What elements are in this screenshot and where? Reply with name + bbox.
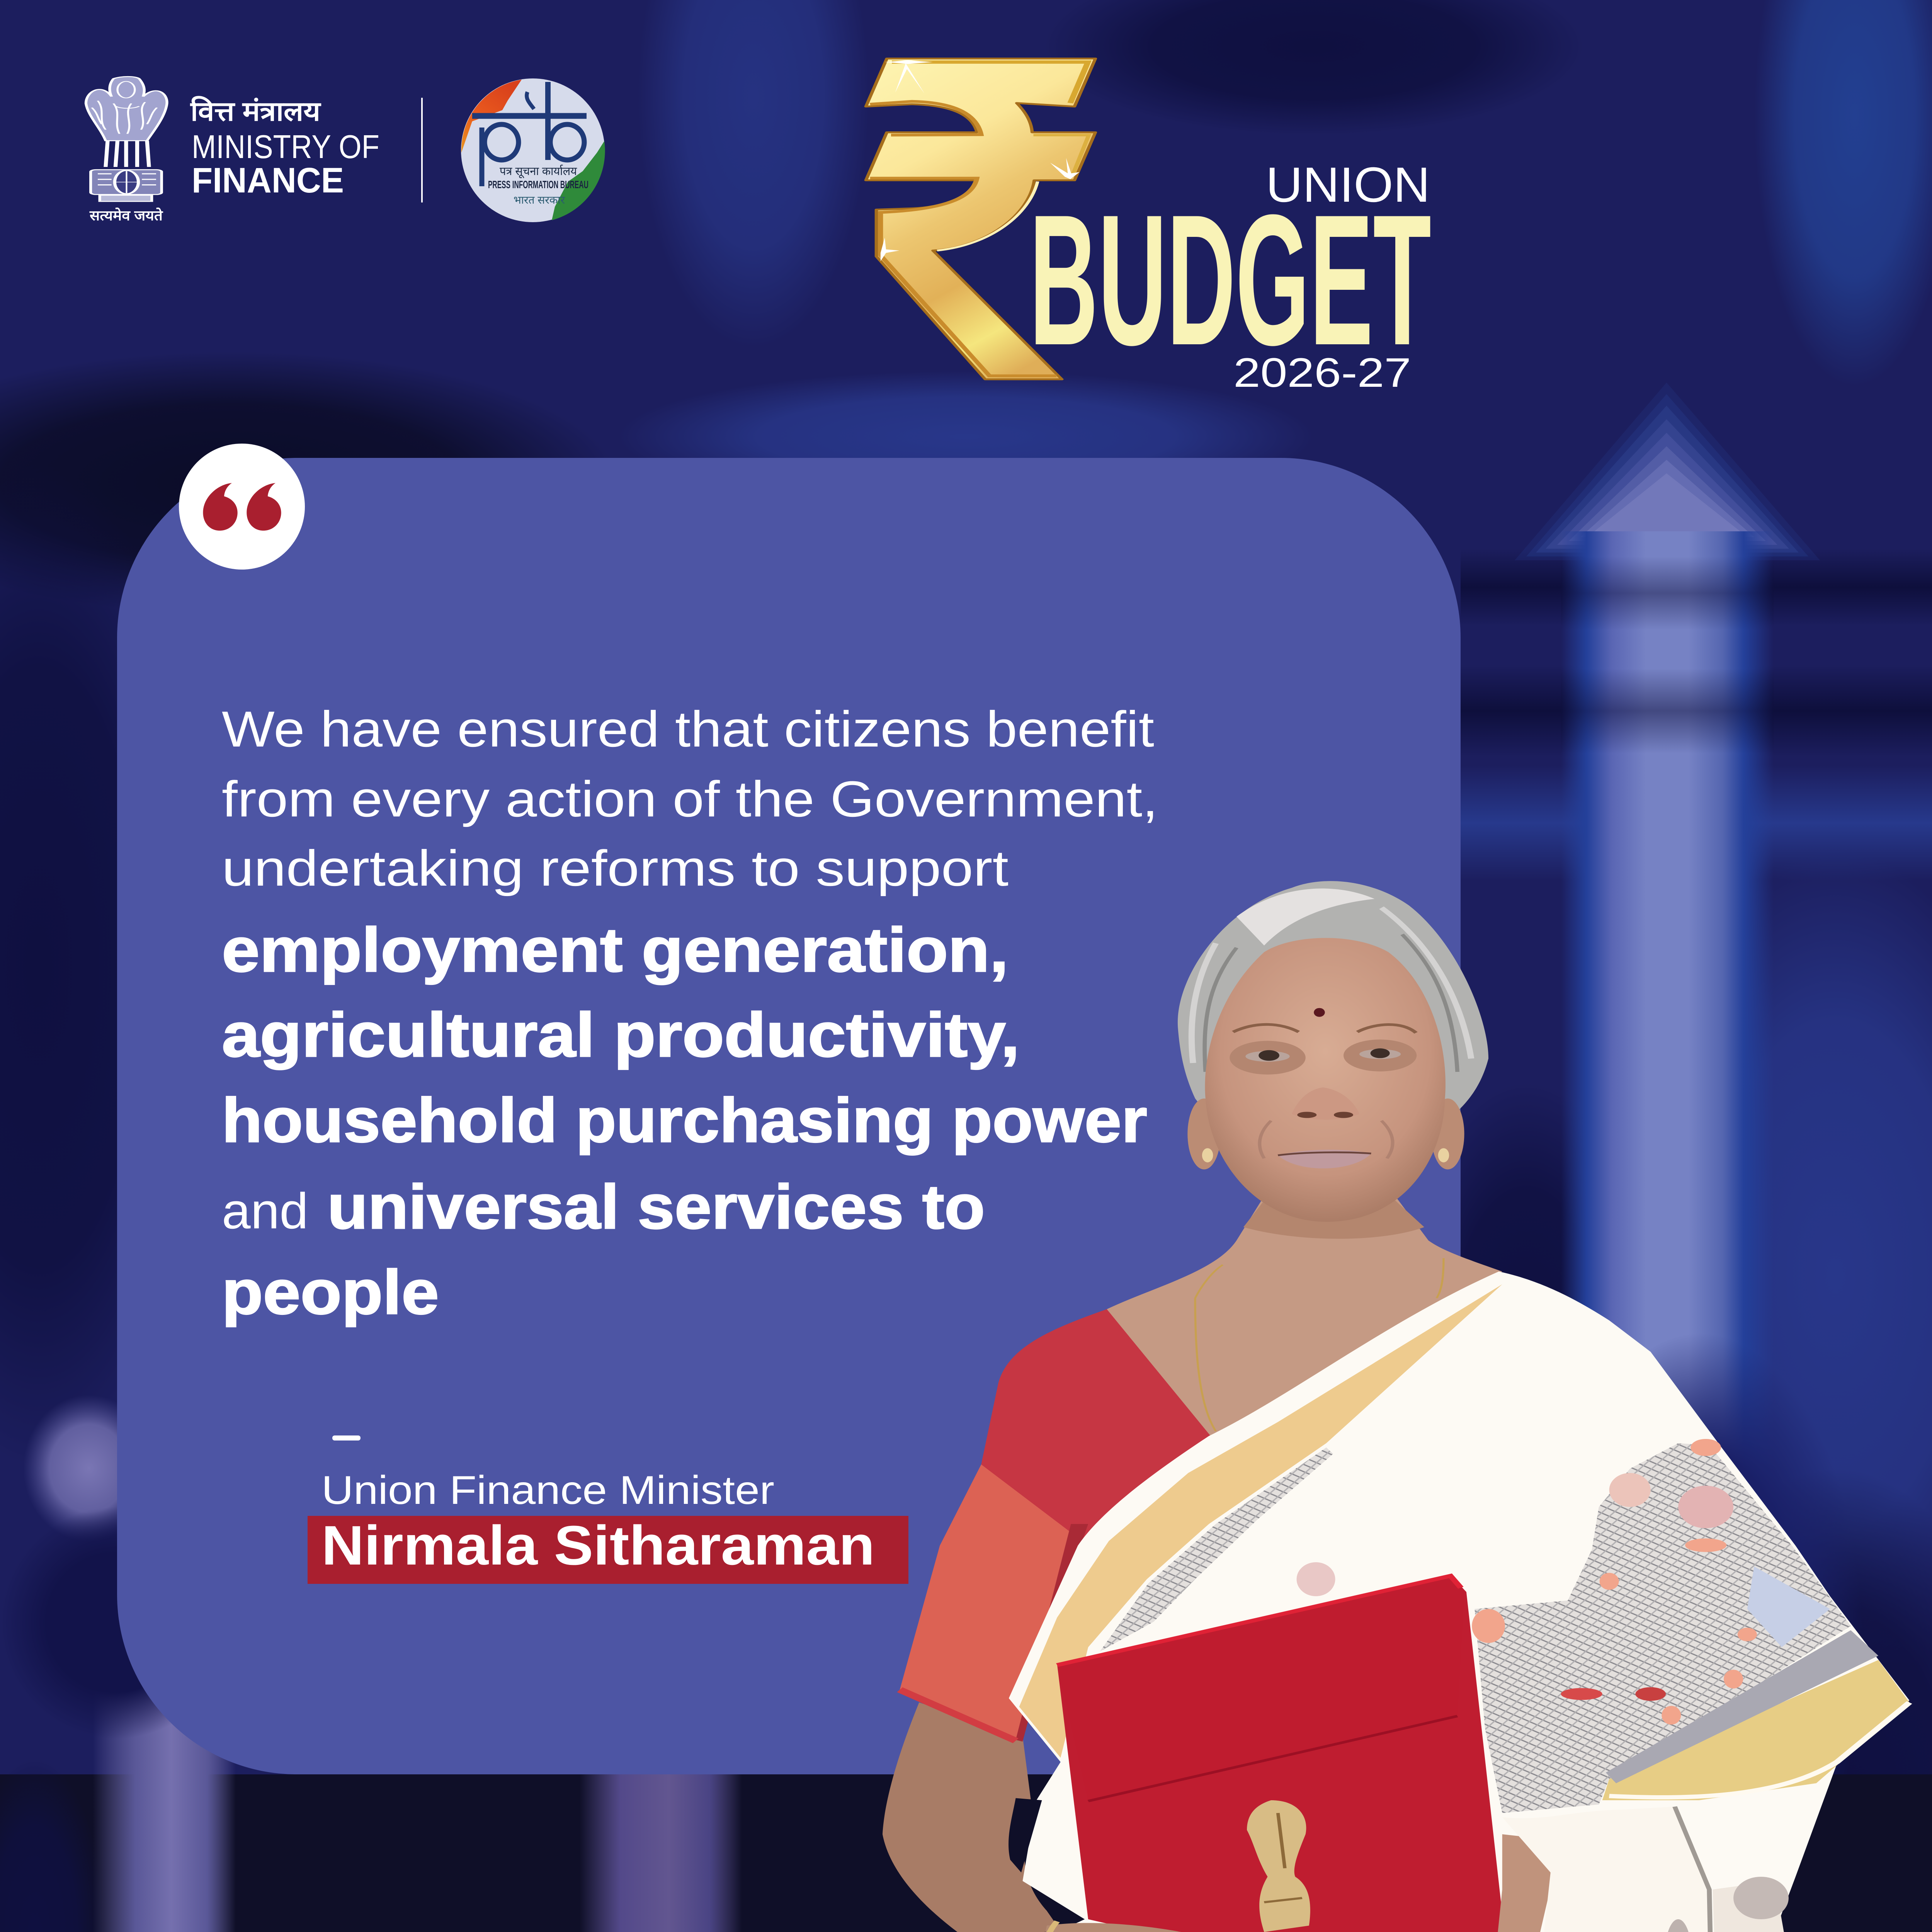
emblem motto: सत्यमेव जयते xyxy=(89,207,163,223)
dark gap between arm and body xyxy=(1009,1798,1042,1872)
title: Union Budget 2026-27 xyxy=(1029,157,1431,396)
quote text: household purchasing power xyxy=(222,1085,1147,1155)
icon: gold rupee symbol xyxy=(866,59,1095,379)
small arrow and columns in background xyxy=(0,1395,742,1932)
attribution dash xyxy=(332,1435,361,1440)
blouse sleeve xyxy=(900,1464,1088,1742)
saree xyxy=(968,1272,1910,1932)
eye sockets xyxy=(1230,1041,1306,1075)
quote text: We have ensured that citizens benefit xyxy=(222,701,1154,757)
quote text: and xyxy=(222,1182,308,1239)
neck and chest xyxy=(1107,1196,1502,1438)
ministry name in Hindi: वित्त मंत्रालय xyxy=(190,96,321,126)
quote text: agricultural productivity, xyxy=(222,1000,1020,1070)
title: Union Budget 2026-27: BUDGET xyxy=(1029,176,1431,384)
icon: quotation marks xyxy=(179,444,305,570)
logo: Ministry of Finance xyxy=(86,77,379,223)
earrings xyxy=(1202,1148,1213,1162)
panel: quote xyxy=(117,458,1461,1774)
face xyxy=(1205,938,1446,1222)
bindi xyxy=(1314,1008,1325,1017)
name badge: Nirmala Sitharaman xyxy=(321,1514,875,1577)
lips xyxy=(1278,1150,1371,1168)
pib captions: पत्र सूचना कार्यालय xyxy=(500,165,577,179)
logo: Press Information Bureau xyxy=(461,78,605,222)
saree border print xyxy=(1100,1447,1333,1651)
head xyxy=(1178,881,1488,1222)
hands xyxy=(1038,1834,1554,1932)
nose xyxy=(1292,1087,1359,1120)
attribution role: Union Finance Minister xyxy=(321,1468,774,1513)
quote text: universal services to xyxy=(327,1172,985,1242)
eyes xyxy=(1245,1051,1290,1062)
logo: Ministry of Finance: FINANCE xyxy=(192,161,344,200)
logo: Press Information Bureau: PRESS INFORMATION BUREAU xyxy=(488,179,588,190)
title: Union Budget 2026-27: 2026-27 xyxy=(1233,349,1411,396)
saree gold border xyxy=(1019,1284,1502,1758)
quote text: people xyxy=(222,1257,439,1327)
red budget folder xyxy=(1057,1575,1504,1932)
quote text: undertaking reforms to support xyxy=(222,840,1009,896)
sparkles xyxy=(881,60,1080,261)
pib wordmark xyxy=(472,82,587,186)
divider xyxy=(421,98,423,202)
quote text: from every action of the Government, xyxy=(222,770,1158,827)
quote text: employment generation, xyxy=(222,915,1009,985)
hair xyxy=(1178,881,1488,1116)
quote text xyxy=(222,701,1158,1327)
smile lines xyxy=(1260,1121,1393,1158)
blouse xyxy=(981,1309,1236,1546)
logo: Press Information Bureau: भारत सरकार xyxy=(514,194,565,206)
large arrow in background xyxy=(1515,383,1862,1932)
saree print xyxy=(1475,1443,1851,1813)
photo: Finance Minister holding red budget folder xyxy=(883,881,1910,1932)
saree pallu drape xyxy=(1419,1807,1803,1932)
ears xyxy=(1187,1099,1221,1170)
left arm xyxy=(883,1702,1779,1932)
brows xyxy=(1233,1024,1416,1033)
icon: national emblem xyxy=(86,77,167,201)
ministry name: MINISTRY OF xyxy=(192,129,379,165)
title: Union Budget 2026-27: UNION xyxy=(1266,157,1430,213)
emblem on folder xyxy=(1247,1800,1310,1932)
